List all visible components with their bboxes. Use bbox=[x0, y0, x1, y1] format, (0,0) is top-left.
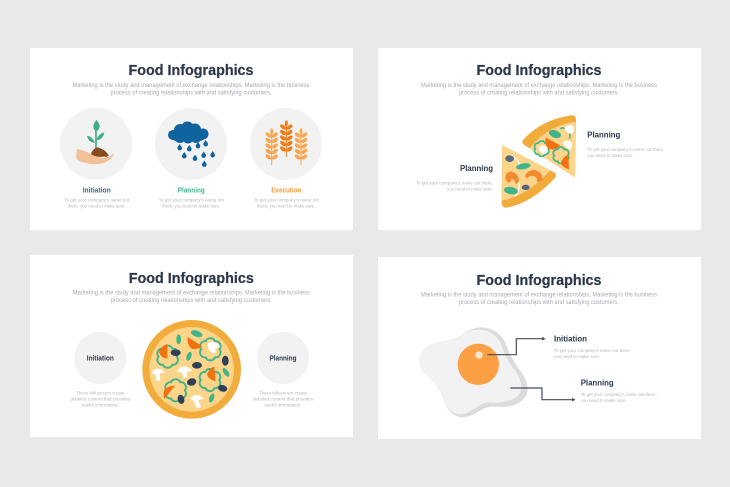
circle label: planning: Planning bbox=[270, 356, 296, 362]
label: planning right bbox=[587, 130, 664, 159]
label: planning right: To get your company's name out there, bbox=[587, 147, 664, 153]
label: planning: Planning bbox=[178, 188, 205, 194]
label: planning bbox=[581, 379, 657, 404]
text: initiation description: detailed content that provides bbox=[70, 396, 131, 402]
subtitle: process of creating relationships with and satisfying customers. bbox=[459, 90, 619, 96]
icon: wheat bbox=[250, 108, 322, 180]
subtitle bbox=[421, 292, 657, 306]
label: planning: there, you need to make sure. bbox=[162, 204, 220, 210]
panel: pizza slices bbox=[378, 48, 701, 230]
label: execution: Execution bbox=[271, 188, 301, 194]
subtitle: Marketing is the study and management of exchange relationships. Marketing is the business bbox=[73, 290, 310, 296]
circle label: initiation bbox=[74, 332, 126, 384]
title: Food Infographics bbox=[129, 270, 254, 287]
arrow: white to planning bbox=[510, 388, 576, 402]
icon: pizza slice lower left bbox=[502, 145, 556, 208]
subtitle: Marketing is the study and management of exchange relationships. Marketing is the business bbox=[421, 292, 657, 298]
text: planning description: detailed content that provides bbox=[253, 396, 314, 402]
text: initiation description: These influencers create bbox=[76, 390, 125, 396]
label: planning: you need to make sure. bbox=[581, 398, 627, 404]
label: initiation bbox=[64, 188, 130, 210]
panel: growth stages bbox=[30, 48, 353, 230]
subtitle: process of creating relationships with and satisfying customers. bbox=[110, 90, 272, 96]
label: planning left: Planning bbox=[460, 164, 493, 173]
icon: seedling in hand bbox=[60, 108, 132, 180]
label: planning right: Planning bbox=[587, 130, 620, 139]
label: planning: To get your company's name out bbox=[159, 198, 224, 204]
icon: whole pizza bbox=[142, 320, 241, 419]
icon: fried egg bbox=[420, 327, 528, 417]
label: execution bbox=[254, 188, 319, 210]
icon: pizza slice upper right bbox=[522, 115, 576, 177]
text: planning description: useful information. bbox=[264, 402, 302, 408]
label: initiation: Initiation bbox=[554, 335, 587, 344]
label: execution: To get your company's name out bbox=[254, 198, 319, 204]
label: planning left: you need to make sure. bbox=[447, 186, 493, 192]
label: execution: there, you need to make sure. bbox=[257, 204, 315, 210]
subtitle bbox=[421, 82, 657, 96]
label: initiation: Initiation bbox=[83, 188, 111, 194]
panel: fried egg bbox=[378, 257, 701, 439]
label: planning: Planning bbox=[581, 379, 614, 388]
arrow: yolk to initiation bbox=[487, 337, 546, 355]
label: planning left: To get your company's name out there, bbox=[416, 180, 493, 186]
subtitle: process of creating relationships with and satisfying customers. bbox=[459, 299, 619, 306]
label: planning: To get your company's name out there, bbox=[581, 392, 657, 398]
subtitle: Marketing is the study and management of exchange relationships. Marketing is the business bbox=[421, 82, 657, 89]
label: planning bbox=[159, 188, 224, 210]
subtitle: Marketing is the study and management of exchange relationships. Marketing is the business bbox=[72, 82, 310, 89]
label: planning left bbox=[416, 164, 493, 192]
label: initiation: you need to make sure. bbox=[554, 354, 600, 360]
title: Food Infographics bbox=[476, 272, 602, 289]
circle label: initiation: Initiation bbox=[87, 356, 114, 362]
label: initiation: To get your company's name out there, bbox=[554, 348, 631, 354]
subtitle bbox=[73, 290, 310, 304]
label: initiation: there, you need to make sure. bbox=[68, 204, 126, 210]
label: planning right: you need to make sure. bbox=[587, 153, 633, 159]
circle label: planning bbox=[257, 332, 309, 384]
text: planning description bbox=[253, 390, 314, 408]
title: Food Infographics bbox=[476, 62, 602, 79]
panel: whole pizza bbox=[30, 255, 353, 437]
text: initiation description: useful information. bbox=[82, 402, 119, 408]
text: initiation description bbox=[70, 390, 131, 408]
icon: rain cloud bbox=[155, 108, 227, 180]
title: Food Infographics bbox=[128, 62, 254, 79]
subtitle bbox=[72, 82, 310, 96]
text: planning description: These influencers create bbox=[259, 390, 307, 396]
subtitle: process of creating relationships with and satisfying customers. bbox=[111, 297, 272, 304]
label: initiation: To get your company's name out bbox=[64, 198, 130, 204]
label: initiation bbox=[554, 335, 631, 360]
